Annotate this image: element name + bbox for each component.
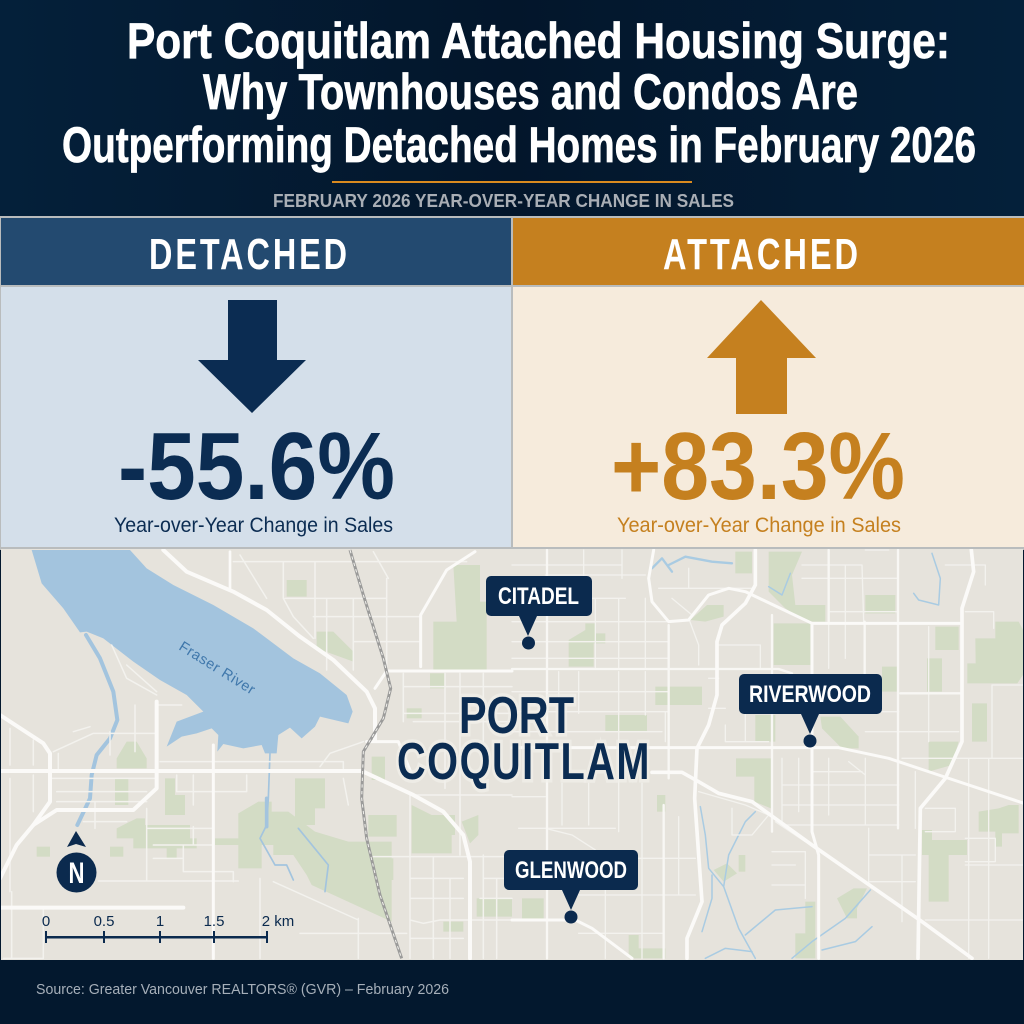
minor roads xyxy=(3,552,512,958)
scale bar: 1 xyxy=(156,913,164,930)
label: fraser river: Fraser River xyxy=(176,639,258,698)
detached caption: Year-over-Year Change in Sales xyxy=(114,514,393,537)
source text: Source: Greater Vancouver REALTORS® (GVR) – February 2026 xyxy=(36,982,449,998)
attached header band xyxy=(513,218,1024,285)
label: port coquitlam: COQUITLAM xyxy=(397,733,651,791)
minor roads east xyxy=(512,550,1024,958)
attached value: +83.3% xyxy=(611,413,905,520)
icon: north arrow: N xyxy=(68,857,84,890)
railway xyxy=(350,550,402,958)
marker: glenwood: GLENWOOD xyxy=(515,857,627,884)
scale bar: 0.5 xyxy=(94,913,114,930)
marker: glenwood xyxy=(504,850,638,924)
creeks xyxy=(652,553,940,958)
title xyxy=(62,13,976,173)
icon: north arrow xyxy=(56,831,96,892)
panel: attached xyxy=(513,218,1024,547)
attached caption: Year-over-Year Change in Sales xyxy=(617,514,901,537)
subtitle: FEBRUARY 2026 YEAR-OVER-YEAR CHANGE IN SALES xyxy=(273,191,734,211)
major roads east xyxy=(512,550,1024,958)
detached header band xyxy=(1,218,511,285)
detached header band: DETACHED xyxy=(149,230,350,279)
detached value: -55.6% xyxy=(118,413,395,520)
scale bar: 1.5 xyxy=(204,913,224,930)
green spaces west xyxy=(37,565,512,932)
icon: down arrow xyxy=(198,300,306,413)
scale bar xyxy=(42,913,294,943)
marker: riverwood: RIVERWOOD xyxy=(749,681,871,708)
map left half xyxy=(0,550,512,958)
map right half xyxy=(512,550,1024,958)
title: Why Townhouses and Condos Are xyxy=(203,64,858,120)
fraser river xyxy=(32,550,353,892)
panel: map xyxy=(0,549,1024,961)
panel: detached xyxy=(1,218,511,547)
attached header band: ATTACHED xyxy=(663,230,861,279)
header panel xyxy=(0,0,1024,217)
secondary roads east xyxy=(512,550,960,958)
marker: citadel: CITADEL xyxy=(498,583,579,610)
footer xyxy=(0,961,1024,1024)
marker: citadel xyxy=(486,576,592,650)
marker: riverwood xyxy=(739,674,882,748)
label: port coquitlam: PORT xyxy=(459,687,574,745)
icon: up arrow xyxy=(707,300,816,414)
label: port coquitlam xyxy=(397,687,651,791)
scale bar: 2 km xyxy=(262,913,294,930)
green spaces east xyxy=(522,552,1024,958)
scale bar: 0 xyxy=(42,913,50,930)
major roads xyxy=(0,550,512,958)
